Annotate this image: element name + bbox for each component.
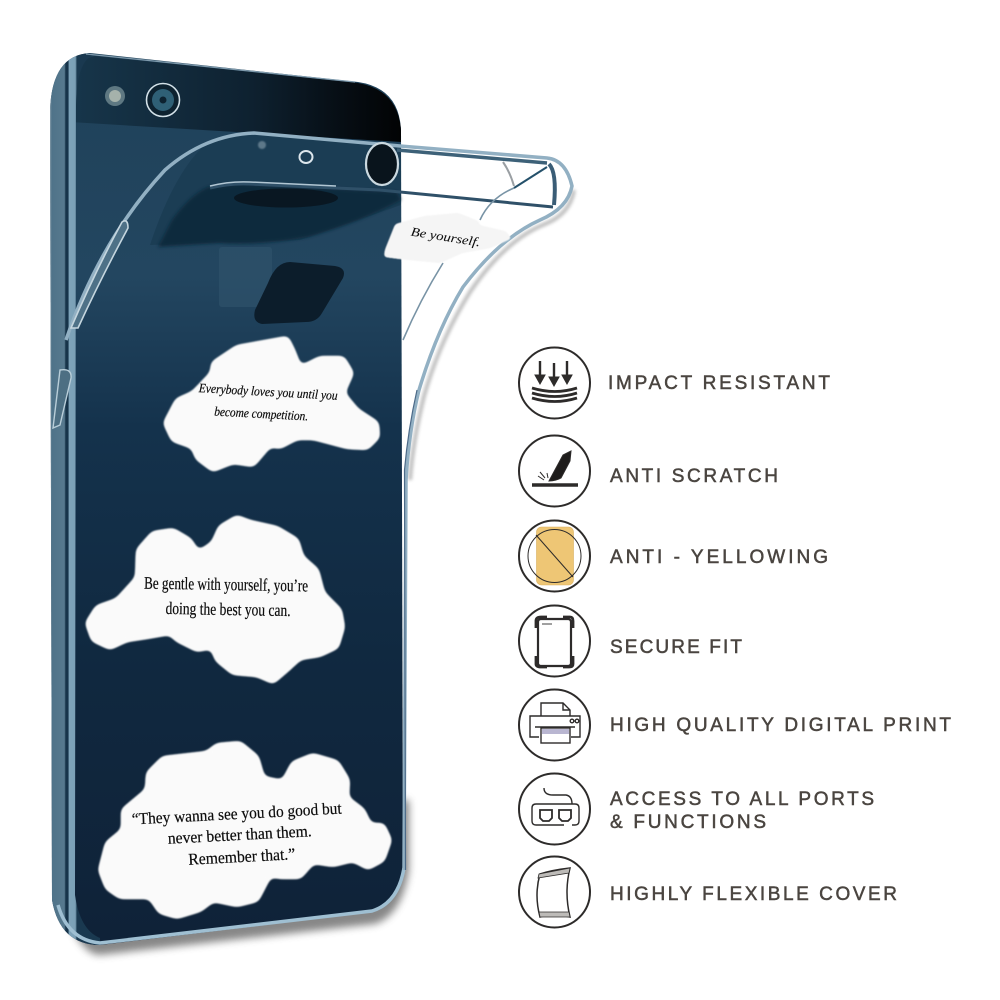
phone body: [50, 53, 403, 945]
cloud: Everybody loves you: Everybody loves you until you: [198, 380, 338, 403]
feature: anti yellowing: [519, 520, 828, 592]
cloud: They wanna see you: “They wanna see you do good but: [131, 799, 342, 828]
case dark shadow over phone: [158, 184, 401, 247]
case inner curve: [403, 188, 514, 340]
icon: blade scratching: [519, 436, 590, 506]
case lower bar highlight: [210, 182, 336, 186]
cloud: Be yourself: Be yourself.: [410, 225, 481, 249]
label: ANTI SCRATCH: [610, 466, 778, 487]
case side button capsule: [71, 221, 128, 328]
case camera cutout: [366, 143, 398, 185]
case flash dot: [258, 141, 266, 149]
camera lens: [146, 84, 180, 116]
label: HIGHLY FLEXIBLE COVER: [610, 884, 897, 905]
case slot: [234, 188, 338, 208]
case soft shadow on white: [410, 190, 574, 480]
label: SECURE FIT: [610, 637, 742, 658]
case diagonal: [514, 167, 547, 188]
icon: impact arrows: [519, 348, 590, 418]
phone top dark band: [70, 56, 401, 142]
case edge dark line: [404, 390, 417, 870]
icon: yellow cover crossed: [519, 520, 590, 592]
label: ANTI - YELLOWING: [610, 547, 828, 568]
icon: printer: [519, 690, 590, 760]
icon: secure phone frame: [519, 606, 590, 676]
cloud: Be gentle: [87, 517, 343, 682]
feature: impact resistant: [519, 348, 830, 418]
label second line: & FUNCTIONS: [610, 812, 766, 833]
bottom rim: [58, 868, 404, 943]
cloud: They wanna see you: [100, 743, 390, 917]
icon: ports: [519, 774, 590, 844]
cloud: Everybody loves you: [165, 338, 378, 470]
cloud: Everybody loves you: become competition.: [214, 404, 309, 423]
case tint over phone: [150, 133, 401, 245]
feature: anti scratch: [519, 436, 778, 506]
top rim highlight: [86, 54, 355, 82]
case lower side button: [53, 370, 71, 428]
feature: high quality digital print: [519, 690, 951, 760]
cloud: They wanna see you: Remember that.”: [188, 844, 296, 869]
label: ACCESS TO ALL PORTS: [610, 789, 874, 810]
feature: highly flexible cover: [519, 856, 897, 928]
phone shadow: [60, 800, 409, 955]
feature: secure fit: [519, 606, 742, 676]
case lower bar: [210, 184, 553, 207]
right edge shadow: [408, 460, 410, 880]
cloud: Be yourself: [385, 214, 510, 262]
feature: access to all ports: [519, 774, 874, 844]
phone with clear case: [50, 53, 574, 955]
cloud: Be gentle: doing the best you can.: [165, 598, 291, 620]
fingerprint hole: [254, 262, 344, 324]
fingerprint ghost rectangle: [219, 247, 272, 307]
case small hole: [300, 151, 312, 163]
icon: bent cover: [519, 856, 590, 928]
label: HIGH QUALITY DIGITAL PRINT: [610, 715, 951, 736]
case upper bar: [397, 150, 547, 163]
phone metallic left edge: [50, 53, 100, 945]
flash: [105, 86, 125, 106]
case inner loop: [503, 162, 514, 186]
case outer edge: [66, 133, 572, 870]
cloud: They wanna see you: never better than them.: [167, 821, 312, 848]
case tip inner band: [549, 164, 555, 205]
cloud: Be gentle: Be gentle with yourself, you’re: [144, 573, 308, 595]
label: IMPACT RESISTANT: [608, 373, 830, 394]
